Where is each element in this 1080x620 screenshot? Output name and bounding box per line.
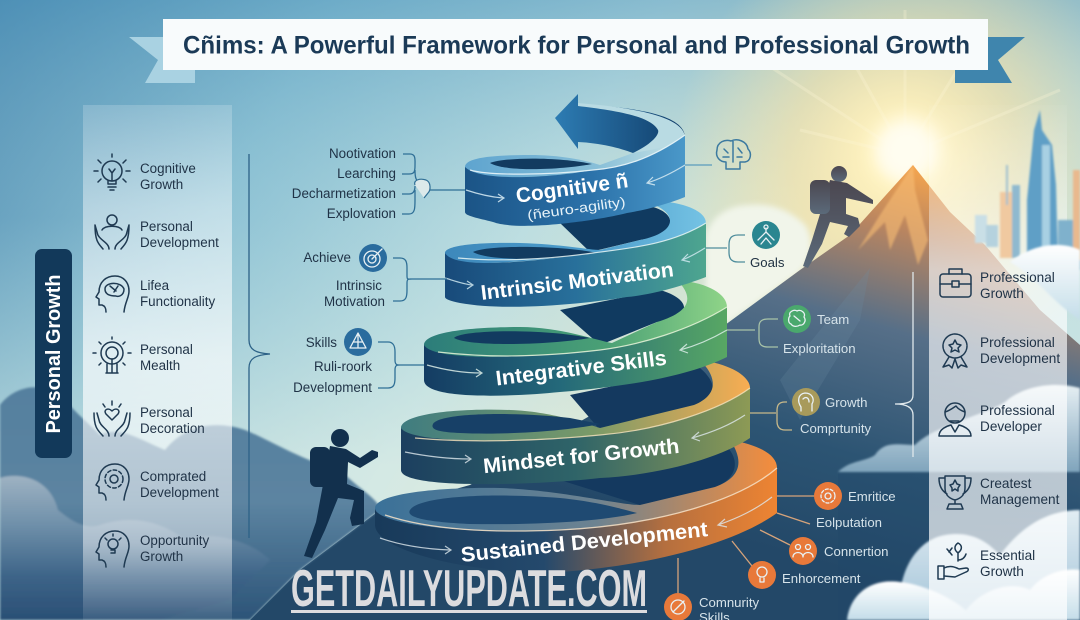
label group: growth bbox=[750, 388, 871, 436]
item: personal decoration bbox=[94, 401, 205, 436]
item: personal decoration: Personal bbox=[140, 405, 193, 420]
band 2: intrinsic motivation: Intrinsic Motivation bbox=[480, 258, 675, 305]
band 1: cognitive ñ with arrow bbox=[465, 94, 685, 226]
item: personal decoration: Decoration bbox=[140, 421, 205, 436]
item: essential growth: Essential bbox=[980, 548, 1035, 563]
band 4: mindset for growth bbox=[401, 360, 750, 484]
icon: skills triangle bbox=[344, 328, 372, 356]
item: professional growth bbox=[940, 269, 1055, 301]
band 1: cognitive ñ with arrow: Cognitive ñ bbox=[515, 169, 630, 208]
watermark bbox=[291, 560, 647, 618]
item: createst management: Createst bbox=[980, 476, 1032, 491]
connector group: cognitive left bbox=[402, 154, 465, 214]
label group: skills: Skills bbox=[306, 335, 337, 350]
icon: community bbox=[664, 593, 692, 620]
item: personal mealth: Personal bbox=[140, 342, 193, 357]
watermark: GETDAILYUPDATE.COM bbox=[291, 560, 647, 618]
title ribbon tail right bbox=[955, 37, 1025, 83]
panel: right column background bbox=[929, 105, 1067, 620]
label group: goals bbox=[706, 221, 785, 270]
item: opportunity growth: Growth bbox=[140, 549, 183, 564]
item: comprated development: Development bbox=[140, 485, 219, 500]
clouds top right bbox=[1010, 245, 1080, 320]
item: professional development: Development bbox=[980, 351, 1060, 366]
item: opportunity growth bbox=[96, 531, 210, 567]
item: personal development: Personal bbox=[140, 219, 193, 234]
item: professional development: Professional bbox=[980, 335, 1055, 350]
item: cognitive growth: Growth bbox=[140, 177, 183, 192]
icon: connertion bbox=[789, 537, 817, 565]
title banner: Cñims: A Powerful Framework for Personal and Professional Growth bbox=[183, 32, 970, 60]
panel: left column bbox=[83, 105, 232, 620]
connector: brain bbox=[685, 164, 712, 166]
label group: achieve bbox=[303, 244, 447, 309]
item: professional developer: Developer bbox=[980, 419, 1042, 434]
label group: achieve: Intrinsic bbox=[336, 278, 382, 293]
item: personal development bbox=[95, 215, 219, 250]
item: comprated development bbox=[96, 464, 219, 500]
band 5: sustained development: Sustained Development bbox=[460, 518, 709, 567]
label group: growth: Growth bbox=[825, 395, 868, 410]
labels: cognitive left bbox=[292, 146, 396, 221]
labels: cognitive left: Nootivation bbox=[329, 146, 396, 161]
labels: cognitive left: Explovation bbox=[327, 206, 396, 221]
band 1: cognitive ñ with arrow: (ñeuro-agility) bbox=[526, 194, 626, 223]
label: personal growth: Personal Growth bbox=[43, 274, 65, 434]
item: professional developer: Professional bbox=[980, 403, 1055, 418]
band 3: integrative skills: Integrative Skills bbox=[494, 347, 668, 390]
label group: skills: Ruli-roork bbox=[314, 359, 372, 374]
climber: lower bbox=[304, 429, 378, 558]
item: comprated development: Comprated bbox=[140, 469, 206, 484]
item: opportunity growth: Opportunity bbox=[140, 533, 210, 548]
item: lifea functionality: Functionality bbox=[140, 294, 215, 309]
label group: sustained development outputs: Comnurity bbox=[699, 595, 759, 610]
brace: left bbox=[249, 154, 270, 538]
label group: sustained development outputs: Eolputation bbox=[816, 515, 882, 530]
icon: emritice bbox=[814, 482, 842, 510]
label group: team: Exploritation bbox=[783, 341, 856, 356]
label group: skills bbox=[293, 328, 424, 395]
title banner bbox=[163, 19, 988, 70]
sun rays bbox=[760, 10, 1060, 155]
item: lifea functionality bbox=[96, 276, 215, 312]
item: essential growth bbox=[938, 543, 1035, 579]
icon: team bbox=[783, 305, 811, 333]
band 5: sustained development bbox=[375, 440, 777, 572]
label group: team bbox=[727, 305, 856, 356]
band 3: integrative skills bbox=[424, 280, 727, 396]
sun glow bbox=[875, 118, 939, 182]
item: cognitive growth: Cognitive bbox=[140, 161, 196, 176]
climber: upper bbox=[803, 166, 873, 268]
label group: skills: Development bbox=[293, 380, 372, 395]
item: cognitive growth bbox=[94, 154, 196, 192]
labels: cognitive left: Decharmetization bbox=[292, 186, 396, 201]
icon: target bbox=[359, 244, 387, 272]
icon: goals bbox=[752, 221, 780, 249]
item: professional development bbox=[943, 334, 1060, 368]
item: personal development: Development bbox=[140, 235, 219, 250]
icon: brain bbox=[717, 140, 750, 169]
item: essential growth: Growth bbox=[980, 564, 1024, 579]
item: createst management bbox=[939, 476, 1060, 509]
big curved arrow bbox=[555, 94, 685, 153]
item: lifea functionality: Lifea bbox=[140, 278, 170, 293]
label group: sustained development outputs: Emritice bbox=[848, 489, 896, 504]
icon: small head bbox=[415, 179, 430, 198]
mountain bbox=[250, 165, 1080, 620]
city skyline bbox=[975, 110, 1080, 270]
back cloud right of spiral bbox=[706, 205, 811, 325]
label group: achieve: Motivation bbox=[324, 294, 385, 309]
title ribbon tail left bbox=[129, 37, 195, 83]
label group: sustained development outputs bbox=[664, 482, 896, 620]
label group: team: Team bbox=[817, 312, 849, 327]
panel: right column items bbox=[938, 269, 1060, 579]
clouds bottom right bbox=[847, 510, 1080, 620]
band 4: mindset for growth: Mindset for Growth bbox=[482, 435, 680, 478]
label group: sustained development outputs: Enhorcement bbox=[782, 571, 861, 586]
label group: growth: Comprtunity bbox=[800, 421, 871, 436]
item: professional growth: Professional bbox=[980, 270, 1055, 285]
label group: achieve: Achieve bbox=[303, 250, 351, 265]
item: professional growth: Growth bbox=[980, 286, 1024, 301]
labels: cognitive left: Learching bbox=[337, 166, 396, 181]
icon: enhorcement bbox=[748, 561, 776, 589]
label group: goals: Goals bbox=[750, 255, 785, 270]
item: professional developer bbox=[939, 403, 1055, 436]
label group: sustained development outputs: Connertion bbox=[824, 544, 889, 559]
brace: right bbox=[895, 272, 913, 457]
clouds bottom left bbox=[0, 387, 380, 620]
item: personal mealth bbox=[93, 337, 193, 373]
item: createst management: Management bbox=[980, 492, 1060, 507]
band 2: intrinsic motivation bbox=[445, 200, 706, 307]
icon: growth head bbox=[792, 388, 820, 416]
label: personal growth bbox=[35, 249, 72, 458]
clouds mid right bbox=[838, 385, 1080, 472]
item: personal mealth: Mealth bbox=[140, 358, 180, 373]
